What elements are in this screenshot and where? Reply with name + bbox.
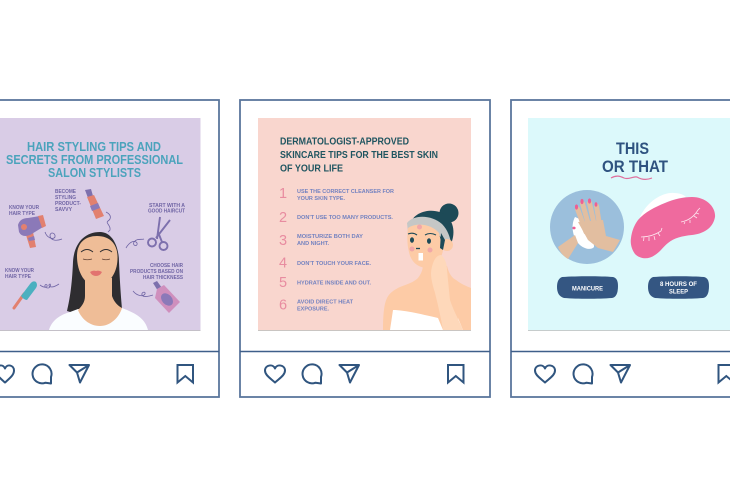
icon: scissors: [148, 217, 170, 250]
icon: squiggle by bottle: [106, 212, 110, 232]
icon: hairbrush: [14, 281, 37, 308]
list numbers: 1: [279, 186, 287, 202]
text block: choose hair products: CHOOSE HAIR: [150, 263, 183, 269]
list text: AND NIGHT.: [297, 241, 329, 247]
heading: this or that: OR THAT: [602, 157, 669, 176]
list numbers: 5: [279, 275, 287, 291]
heading: this or that: [602, 139, 669, 176]
button: 8 hours of sleep: SLEEP: [669, 288, 689, 296]
text block: start with a good haircut: [148, 203, 185, 214]
panel: post frame 3: [511, 100, 730, 397]
illustration: manicure hands: [550, 190, 624, 264]
button: 8 hours of sleep: [648, 276, 709, 299]
icon: send: [610, 365, 630, 382]
icon: heart: [0, 365, 14, 382]
illustration: woman with bun: [383, 204, 471, 330]
heading: hair styling tips: SECRETS FROM PROFESSIONAL: [6, 152, 183, 167]
icon: bookmark: [718, 365, 730, 382]
heading: hair styling tips: HAIR STYLING TIPS AND: [27, 139, 161, 154]
icon: styling bottle: [85, 189, 104, 219]
list text: HYDRATE INSIDE AND OUT.: [297, 280, 371, 286]
icon: comment bubble: [574, 364, 593, 384]
heading: dermatologist tips: DERMATOLOGIST-APPROVED: [280, 136, 409, 148]
text block: become styling product savvy: BECOME: [55, 189, 77, 195]
text block: know your hair type top: KNOW YOUR: [9, 205, 39, 211]
panel: lavender hair tips artwork: [0, 118, 200, 330]
icon: bookmark: [448, 365, 464, 382]
heading: dermatologist tips: [280, 136, 438, 174]
list numbers: 2: [279, 210, 287, 226]
panel: post frame 1: [0, 100, 219, 397]
illustration: woman with long hair: [49, 232, 148, 330]
list numbers: 4: [279, 256, 287, 272]
text block: become styling product savvy: PRODUCT-: [55, 201, 81, 207]
illustration: pink sleep mask: [631, 193, 715, 258]
heading: hair styling tips: SALON STYLISTS: [48, 165, 141, 180]
list text: DON'T TOUCH YOUR FACE.: [297, 261, 371, 267]
icon: pink squiggle: [611, 176, 652, 179]
button: 8 hours of sleep: 8 HOURS OF: [660, 281, 697, 288]
list text: [297, 189, 395, 312]
icon: squiggle by scissors: [126, 239, 144, 248]
icon: bookmark: [178, 365, 193, 382]
list: skincare tips: [279, 186, 395, 314]
heading: hair styling tips: [6, 139, 183, 180]
icon: heart: [535, 365, 555, 382]
button: manicure: MANICURE: [572, 286, 604, 292]
list text: EXPOSURE.: [297, 306, 329, 312]
list numbers: 3: [279, 233, 287, 249]
list numbers: [279, 186, 287, 314]
list text: AVOID DIRECT HEAT: [297, 300, 353, 306]
text block: become styling product savvy: STYLING: [55, 195, 76, 201]
heading: dermatologist tips: OF YOUR LIFE: [280, 164, 343, 174]
nail polish: [572, 198, 597, 229]
text block: know your hair type lower: KNOW YOUR: [5, 268, 34, 274]
text block: know your hair type top: [9, 205, 39, 217]
list numbers: 6: [279, 298, 287, 314]
heading: this or that: THIS: [616, 139, 649, 158]
panel: post frame 2: [240, 100, 490, 397]
heading: dermatologist tips: SKINCARE TIPS FOR THE BEST SKIN: [280, 150, 438, 161]
icon: heart: [265, 365, 285, 382]
icon: squiggle by brush: [40, 284, 59, 288]
icon: send: [70, 365, 89, 382]
panel: peach skincare artwork: [258, 118, 471, 330]
list text: USE THE CORRECT CLEANSER FOR: [297, 189, 395, 195]
panel: aqua this or that artwork: [528, 118, 730, 330]
text block: know your hair type lower: [5, 268, 34, 280]
text block: choose hair products: HAIR THICKNESS: [143, 275, 184, 281]
text block: become styling product savvy: SAVVY: [55, 207, 73, 213]
icon: pink product bottle: [153, 281, 180, 313]
text block: choose hair products: [130, 263, 184, 281]
text block: start with a good haircut: GOOD HAIRCUT: [148, 208, 185, 214]
button: manicure: [557, 276, 618, 299]
text block: start with a good haircut: START WITH A: [149, 203, 185, 209]
text block: know your hair type lower: HAIR TYPE: [5, 274, 32, 280]
text block: become styling product savvy: [55, 189, 81, 213]
icon: squiggle by pink bottle: [133, 291, 153, 297]
text block: choose hair products: PRODUCTS BASED ON: [130, 269, 183, 275]
text block: know your hair type top: HAIR TYPE: [9, 211, 36, 217]
icon: comment bubble: [33, 364, 52, 384]
list text: YOUR SKIN TYPE.: [297, 196, 345, 202]
icon: send: [340, 365, 359, 382]
icon: hair dryer: [18, 215, 46, 248]
icon: comment bubble: [303, 364, 322, 384]
icon: squiggle by dryer: [45, 232, 62, 240]
list text: DON'T USE TOO MANY PRODUCTS.: [297, 215, 393, 221]
list text: MOISTURIZE BOTH DAY: [297, 234, 363, 240]
